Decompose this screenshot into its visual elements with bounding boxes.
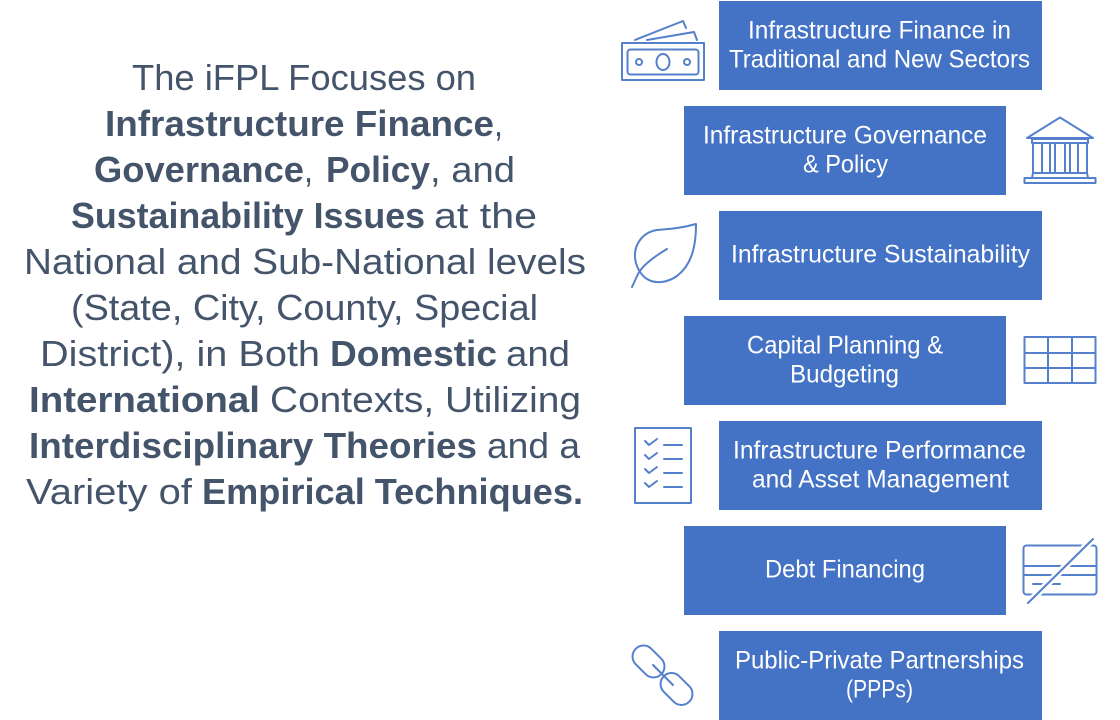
panel: debt financing: Debt Financing	[765, 556, 925, 584]
icon: government building	[1024, 118, 1096, 183]
panel: debt financing	[684, 526, 1006, 615]
heading: iFPL focus statement: (State, City, County, Special	[71, 287, 538, 328]
panel: infrastructure finance: Infrastructure Finance in	[748, 16, 1011, 44]
panel: performance and asset management	[719, 421, 1042, 510]
heading: iFPL focus statement: , and	[430, 149, 515, 190]
panel: governance and policy: & Policy	[803, 150, 888, 178]
panel: public-private partnerships: (PPPs)	[846, 676, 913, 704]
heading: iFPL focus statement: ,	[304, 149, 313, 190]
heading: iFPL focus statement: ,	[494, 103, 503, 144]
panel: performance and asset management: Infrastructure Performance	[733, 436, 1026, 464]
icon: money	[622, 21, 704, 80]
heading: iFPL focus statement: The iFPL Focuses on	[132, 57, 476, 98]
heading: iFPL focus statement: International	[29, 379, 260, 420]
icon: chain link	[628, 641, 697, 710]
heading: iFPL focus statement: Empirical Techniques.	[202, 471, 583, 512]
heading: iFPL focus statement: Infrastructure Finance	[105, 103, 494, 144]
heading: iFPL focus statement: and	[506, 333, 570, 374]
heading: iFPL focus statement: at the	[434, 195, 537, 236]
panel: capital planning: Budgeting	[790, 360, 899, 388]
icon: table grid	[1024, 337, 1096, 383]
panel: capital planning: Capital Planning &	[747, 332, 943, 360]
heading: iFPL focus statement: Sustainability Issues	[71, 195, 425, 236]
panel: performance and asset management: and Asset Management	[752, 466, 1009, 494]
icon: crossed-out credit card	[1024, 539, 1096, 603]
panel: governance and policy	[684, 106, 1006, 195]
icon: leaf	[632, 224, 696, 287]
heading: iFPL focus statement: National and Sub-National levels	[24, 241, 586, 282]
panel: sustainability	[719, 211, 1042, 300]
heading: iFPL focus statement: Contexts, Utilizing	[270, 379, 581, 420]
heading: iFPL focus statement	[24, 57, 586, 512]
icon: checklist	[635, 428, 691, 503]
heading: iFPL focus statement: Governance	[94, 149, 304, 190]
heading: iFPL focus statement: Domestic	[330, 333, 497, 374]
heading: iFPL focus statement: Interdisciplinary Theories	[29, 425, 477, 466]
heading: iFPL focus statement: and a	[487, 425, 581, 466]
panel: governance and policy: Infrastructure Governance	[703, 122, 987, 150]
panel: infrastructure finance	[719, 1, 1042, 90]
heading: iFPL focus statement: Variety of	[26, 471, 193, 512]
panel: public-private partnerships	[719, 631, 1042, 720]
heading: iFPL focus statement: Policy	[326, 149, 430, 190]
panel: infrastructure finance: Traditional and New Sectors	[729, 46, 1030, 74]
panel: sustainability: Infrastructure Sustainability	[731, 240, 1030, 268]
panel: public-private partnerships: Public-Private Partnerships	[735, 646, 1024, 674]
panel: capital planning	[684, 316, 1006, 405]
heading: iFPL focus statement: District), in Both	[40, 333, 320, 374]
